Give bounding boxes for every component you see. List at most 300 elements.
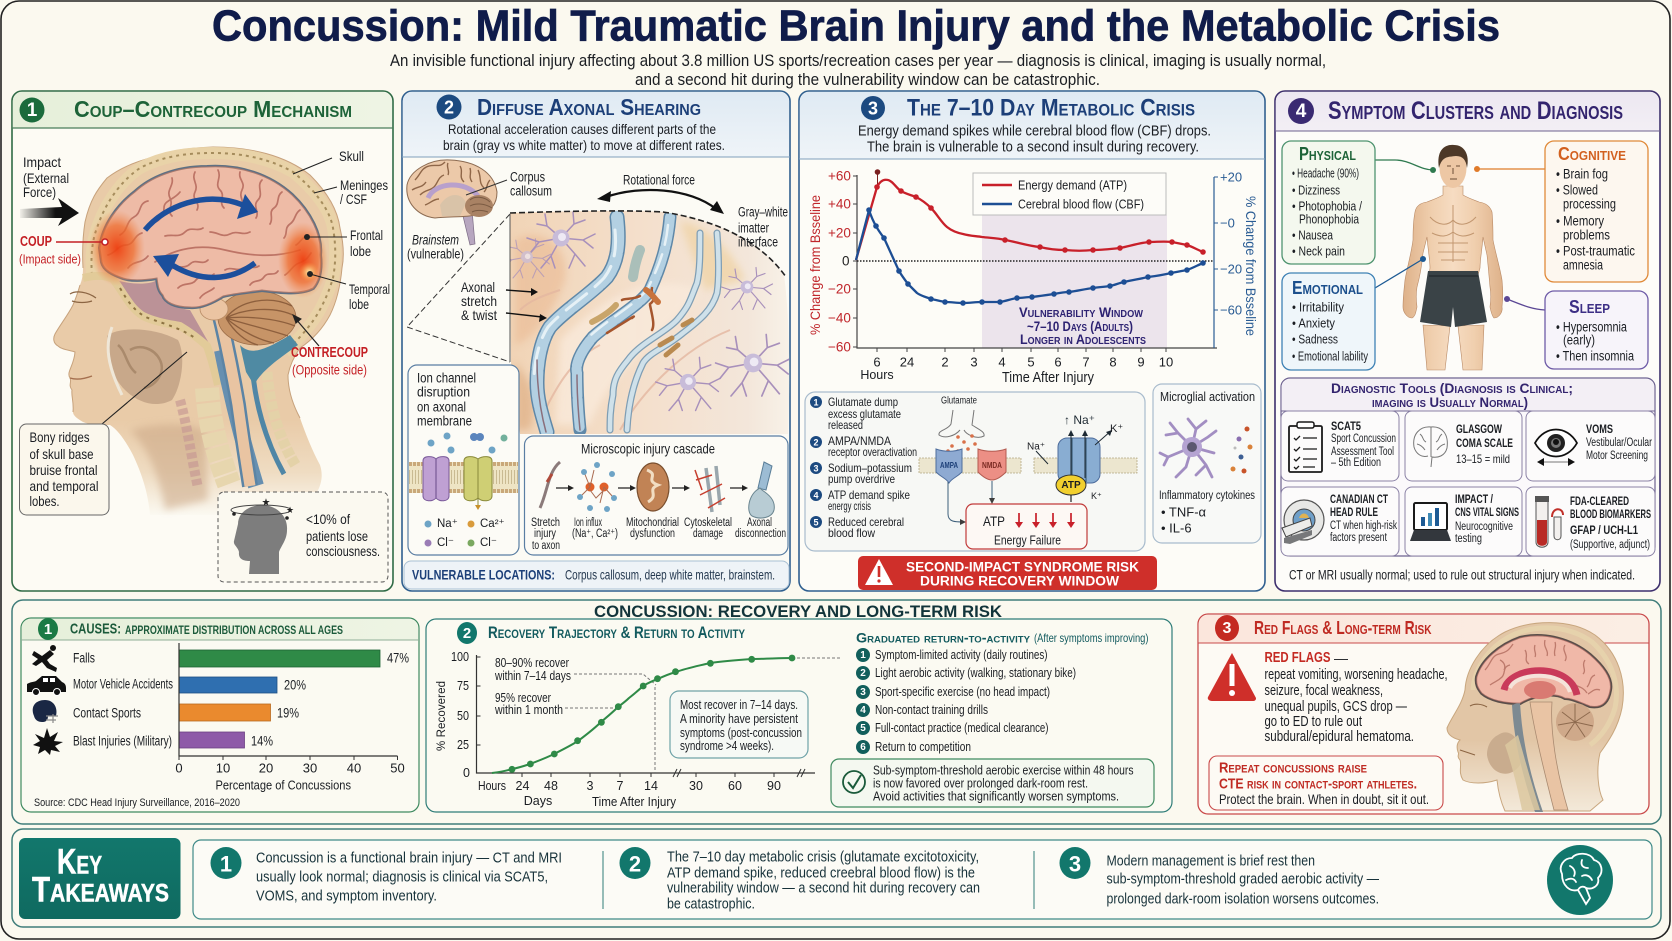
- recovery x labels: 24: [516, 779, 529, 793]
- tool: VOMS: Motor Screening: [1586, 450, 1648, 462]
- panel 3 description: Energy demand spikes while cerebral blood flow (CBF) drops.: [858, 122, 1211, 140]
- panel 1: coup-contrecoup mechanism: [12, 91, 393, 591]
- callout: bony ridges: Bony ridges: [30, 429, 90, 445]
- cascade labels: Stretch: [531, 517, 560, 529]
- corpus and brainstem labels: [407, 170, 552, 262]
- graduated return-to-activity list: Full-contact practice (medical clearance): [875, 721, 1048, 735]
- vulnerable locations bar: VULNERABLE LOCATIONS:: [412, 566, 555, 582]
- CTE risk box: CTE risk in contact-sport athletes.: [1219, 776, 1417, 792]
- recovery x labels: Time After Injury: [592, 795, 677, 809]
- takeaway 1: Concussion is a functional brain injury — CT and MRI: [256, 850, 562, 866]
- gray-white interface label: imatter: [738, 220, 769, 236]
- x-axis labels: 24: [900, 354, 914, 370]
- bar: falls: 47%: [387, 650, 409, 666]
- bar: blast injuries: [33, 728, 273, 755]
- impact label: Impact: [23, 154, 61, 170]
- spine: [180, 308, 298, 488]
- skull base: [83, 276, 218, 385]
- bar: blast injuries: Blast Injuries (Military): [73, 734, 172, 748]
- panel 4: symptom clusters and diagnosis: [1275, 91, 1660, 591]
- tool: blood biomarkers: [1526, 487, 1655, 556]
- cascade icons: [540, 462, 774, 518]
- synapse diagram: Glutamate: [941, 396, 977, 406]
- connectors: [1375, 160, 1545, 310]
- chart legend: Cerebral blood flow (CBF): [1018, 196, 1144, 212]
- emotional symptoms: • Anxiety: [1292, 316, 1335, 330]
- panel 2 heading: Diffuse Axonal Shearing: [477, 94, 701, 120]
- gray-white interface label: Gray–white: [738, 204, 788, 220]
- badge 1: [20, 98, 44, 122]
- y-axis labels left: 0: [842, 254, 850, 268]
- recovery callouts: [494, 656, 571, 717]
- emotional symptoms: • Emotional lability: [1292, 348, 1368, 364]
- cognitive symptoms: • Slowed: [1556, 182, 1598, 198]
- synapse diagram: AMPA: [940, 460, 958, 470]
- cognitive symptoms: [1545, 141, 1648, 282]
- recovery note box: A minority have persistent: [680, 712, 798, 726]
- bar: motor vehicle accidents: Motor Vehicle Accidents: [73, 676, 173, 692]
- recovery y labels: % Recovered: [436, 681, 448, 751]
- sleep symptoms: (early): [1563, 332, 1595, 348]
- numbered mechanism list: Reduced cerebral: [828, 515, 904, 529]
- red flags text: subdural/epidural hematoma.: [1264, 729, 1414, 745]
- external force arrow: [20, 198, 79, 226]
- synapse diagram: [919, 396, 1137, 525]
- microscopic injury cascade: [524, 436, 788, 555]
- mechanism box: [805, 392, 1145, 551]
- numbered mechanism list: released: [828, 418, 863, 432]
- cognitive symptoms: • Memory: [1556, 214, 1604, 228]
- tool: Glasgow Coma Scale: COMA SCALE: [1456, 436, 1513, 450]
- second-impact warning banner: DURING RECOVERY WINDOW: [920, 574, 1119, 588]
- icon: check mark: [843, 771, 865, 793]
- contrecoup label: [291, 315, 368, 378]
- cognitive symptoms: processing: [1563, 196, 1616, 212]
- emotional symptoms: • Sadness: [1292, 332, 1338, 346]
- numbered mechanism list: pump overdrive: [828, 472, 895, 486]
- axon tissue illustration: [407, 211, 790, 434]
- red flags text: repeat vomiting, worsening headache,: [1264, 667, 1448, 683]
- red flags heading: Red Flags & Long-term Risk: [1254, 618, 1432, 638]
- panel: recovery trajectory: [426, 619, 1172, 812]
- CTE risk box: Protect the brain. When in doubt, sit it out.: [1219, 791, 1429, 807]
- numbered mechanism list: 5: [813, 518, 819, 528]
- bar: contact sports: Contact Sports: [73, 706, 141, 720]
- impact label: [23, 154, 69, 200]
- key takeaways section: [12, 829, 1661, 927]
- graduated return-to-activity list: Sport-specific exercise (no head impact): [875, 685, 1050, 699]
- recovery y labels: 100: [451, 650, 469, 664]
- recovery y labels: [436, 650, 470, 780]
- small sagittal brain: [407, 160, 507, 245]
- tool: Canadian CT Head Rule: HEAD RULE: [1330, 505, 1378, 519]
- takeaways box: [193, 840, 1652, 919]
- panel 1 heading: Coup–Contrecoup Mechanism: [74, 96, 352, 122]
- impact label: Force): [23, 184, 56, 200]
- rotational force arrow: Rotational force: [623, 172, 695, 188]
- graduated return-to-activity list: Light aerobic activity (walking, stationary bike): [875, 666, 1076, 680]
- synapse diagram: Na⁺: [1027, 442, 1045, 452]
- badge: causes: 1: [44, 621, 52, 638]
- chart legend: Energy demand (ATP): [1018, 178, 1127, 192]
- recovery x labels: 7: [617, 779, 624, 793]
- vulnerability window: Vulnerability Window: [1019, 304, 1144, 320]
- y-axis labels left: +20: [828, 226, 851, 240]
- microglial activation box: Inflammatory cytokines: [1159, 490, 1255, 502]
- numbered mechanism list: 4: [813, 490, 819, 500]
- synapse diagram: K⁺: [1091, 491, 1102, 501]
- causes heading: APPROXIMATE DISTRIBUTION ACROSS ALL AGES: [125, 623, 343, 637]
- badge 2: [436, 94, 462, 120]
- ion channel box: on axonal: [417, 400, 466, 414]
- ion legend: [424, 518, 505, 549]
- chart legend: [973, 173, 1166, 215]
- numbered mechanism list: excess glutamate: [828, 407, 901, 421]
- recovery note box: symptoms (post-concussion: [680, 726, 802, 740]
- tool: SCAT5: Sport Concussion: [1331, 433, 1396, 445]
- bar axis labels: 40: [347, 760, 361, 776]
- y-axis labels left: −20: [828, 282, 851, 296]
- contrecoup label: CONTRECOUP: [291, 345, 368, 361]
- numbered mechanism list: AMPA/NMDA: [828, 434, 891, 448]
- badge: recovery: 2: [463, 625, 471, 642]
- green recovery curve: [492, 655, 795, 773]
- cerebellum and pons: [200, 291, 296, 345]
- takeaway 3: [1060, 847, 1379, 908]
- cascade labels: (Na⁺, Ca²⁺): [572, 528, 618, 540]
- cognitive symptoms: Cognitive: [1558, 144, 1626, 164]
- cascade labels: Mitochondrial: [626, 517, 679, 529]
- tool: IMPACT: CNS VITAL SIGNS: [1455, 505, 1519, 519]
- physical symptoms: • Neck pain: [1292, 244, 1345, 258]
- takeaway 1: [210, 847, 562, 904]
- panel: red flags and long-term risk: [1198, 614, 1649, 814]
- anatomy labels: [293, 148, 390, 312]
- icon: warning triangle: [1208, 653, 1256, 701]
- callout: bony ridges: and temporal: [30, 478, 98, 494]
- y-axis labels left: −40: [828, 310, 851, 326]
- cascade labels: disconnection: [735, 528, 786, 540]
- gray-white interface label: interface: [738, 234, 778, 250]
- subtitle: An invisible functional injury affecting about 3.8 million US sports/recreation cases per year — diagnosis is clinical, imaging is usually normal,: [390, 52, 1326, 70]
- takeaway 3: prolonged dark-room isolation worsens outcomes.: [1106, 890, 1379, 908]
- cascade labels: damage: [693, 528, 723, 540]
- subtitle: and a second hit during the vulnerability window can be catastrophic.: [635, 71, 1100, 89]
- physical symptoms: • Dizziness: [1292, 182, 1340, 198]
- panel 3 description: The brain is vulnerable to a second insult during recovery.: [867, 138, 1199, 156]
- numbered mechanism list: [810, 395, 917, 540]
- subtitle: [390, 52, 1326, 89]
- recovery note box: syndrome >4 weeks).: [680, 739, 774, 753]
- ion channel box: membrane: [417, 414, 472, 428]
- tool: Glasgow Coma Scale: [1405, 411, 1522, 481]
- cascade labels: Cytoskeletal: [684, 517, 732, 529]
- ATP energy failure box: [966, 504, 1087, 549]
- cognitive symptoms: • Brain fog: [1556, 166, 1608, 182]
- bar: motor vehicle accidents: [27, 676, 306, 696]
- numbered mechanism list: ATP demand spike: [828, 488, 910, 502]
- diagnostic heading: [1331, 380, 1573, 410]
- bar axis labels: 20: [259, 760, 273, 776]
- head anatomy illustration: [54, 147, 343, 515]
- recovery x labels: 60: [728, 779, 742, 793]
- exercise recommendation box: is now favored over prolonged dark-room rest.: [873, 776, 1088, 790]
- graduated return-to-activity list: 1: [860, 650, 866, 661]
- ion legend: Ca²⁺: [480, 518, 505, 530]
- x-axis labels: Time After Injury: [1002, 370, 1095, 386]
- graduated return-to-activity list: Return to competition: [875, 740, 971, 754]
- CTE risk box: [1209, 756, 1443, 810]
- vulnerability window: Longer in Adolescents: [1020, 331, 1146, 347]
- badge: red flags: [1215, 615, 1239, 641]
- blue curve: cerebral blood flow: [856, 207, 1206, 306]
- badge 3: [861, 96, 885, 120]
- line chart: metabolic crisis: [807, 168, 1259, 386]
- panel 2: diffuse axonal shearing: [402, 91, 790, 591]
- anatomy labels: Temporal: [349, 281, 390, 297]
- panel 2 description: [443, 121, 725, 153]
- numbered mechanism list: 1: [813, 398, 819, 408]
- badge 3: 3: [868, 98, 878, 118]
- contrecoup label: (Opposite side): [292, 362, 367, 378]
- red flags text: seizure, focal weakness,: [1264, 683, 1383, 699]
- graduated return-to-activity list: 6: [860, 742, 866, 753]
- bar: falls: Falls: [73, 650, 95, 666]
- y-axis labels right: +20: [1220, 170, 1242, 184]
- panel 3 description: [858, 122, 1211, 156]
- takeaway 2: vulnerability window — a second hit during recovery can: [667, 880, 980, 896]
- axonal stretch label: & twist: [461, 307, 497, 323]
- vulnerable locations bar: [404, 561, 789, 589]
- bar axis labels: 10: [216, 760, 230, 776]
- axon strands: [534, 217, 718, 432]
- panel 2 description: Rotational acceleration causes different parts of the: [448, 121, 716, 137]
- takeaway 2: [620, 847, 980, 912]
- key takeaways block: Key: [57, 842, 102, 882]
- anatomy labels: Meninges: [340, 177, 388, 193]
- takeaway 1: usually look normal; diagnosis is clinical via SCAT5,: [256, 868, 548, 886]
- synapse diagram: NMDA: [982, 460, 1002, 470]
- recovery x labels: 30: [689, 779, 703, 793]
- tool: VOMS: Vestibular/Ocular: [1586, 437, 1652, 449]
- gray-white interface label: [738, 204, 788, 250]
- cascade labels: Axonal: [747, 517, 772, 529]
- takeaway 1: 1: [220, 852, 232, 876]
- numbered mechanism list: blood flow: [828, 526, 875, 540]
- sleep symptoms: • Then insomnia: [1556, 348, 1634, 364]
- badge: red flags: 3: [1223, 620, 1232, 637]
- synapse diagram: K⁺: [1110, 423, 1123, 435]
- icon: brain in teal circle: [1547, 845, 1613, 915]
- numbered mechanism list: 2: [813, 438, 819, 448]
- takeaway 3: sub-symptom-threshold graded aerobic activity —: [1106, 870, 1379, 888]
- microscopic injury cascade: Microscopic injury cascade: [581, 440, 715, 456]
- callout: loss of consciousness: consciousness.: [306, 543, 380, 559]
- panel 2 description: brain (gray vs white matter) to move at different rates.: [443, 137, 725, 153]
- icon: dizzy head silhouette: ★: [286, 505, 294, 515]
- sleep symptoms: Sleep: [1569, 297, 1610, 317]
- badge 4: 4: [1296, 101, 1307, 122]
- cognitive symptoms: amnesia: [1563, 258, 1603, 272]
- y-axis labels right: [1220, 170, 1259, 336]
- x-axis labels: 6: [1054, 354, 1062, 370]
- tool: IMPACT: IMPACT /: [1455, 492, 1493, 506]
- vulnerable locations bar: Corpus callosum, deep white matter, brainstem.: [565, 566, 775, 582]
- tool: VOMS: VOMS: [1586, 422, 1613, 436]
- graduated return-to-activity list: Graduated return-to-activity: [856, 630, 1030, 646]
- impact glow areas: [89, 210, 328, 298]
- x-axis labels: 4: [998, 354, 1006, 370]
- membrane with channels: [409, 432, 518, 510]
- red flags text: go to ED to rule out: [1264, 714, 1362, 730]
- recovery callouts: 80–90% recover: [495, 656, 569, 670]
- badge 2: 2: [444, 98, 454, 118]
- graduated return-to-activity list: 5: [860, 723, 866, 734]
- rotation arrows: [145, 194, 258, 278]
- bar: falls: [32, 645, 409, 672]
- cascade labels: to axon: [532, 540, 560, 552]
- red flags text: —: [1334, 650, 1348, 666]
- recovery x labels: Hours: [478, 779, 506, 793]
- graduated return-to-activity list: (After symptoms improving): [1034, 631, 1148, 645]
- tool: Glasgow Coma Scale: GLASGOW: [1456, 422, 1502, 436]
- x-axis labels: 8: [1109, 354, 1117, 370]
- anatomy labels: Frontal: [350, 227, 383, 243]
- vulnerability window: [982, 215, 1167, 348]
- axonal stretch label: stretch: [461, 293, 497, 309]
- numbered mechanism list: Sodium–potassium: [828, 461, 912, 475]
- takeaway 3: Modern management is brief rest then: [1106, 852, 1315, 870]
- tool: blood biomarkers: GFAP / UCH-L1: [1570, 523, 1638, 537]
- cytokine dots: [1230, 426, 1252, 474]
- callout: bony ridges: of skull base: [30, 446, 94, 462]
- numbered mechanism list: 3: [813, 464, 819, 474]
- y-axis labels left: +60: [828, 168, 851, 184]
- bar chart: causes: [27, 643, 409, 792]
- cascade labels: [531, 517, 786, 552]
- graduated return-to-activity list: 2: [860, 668, 866, 679]
- recovery curve chart: [436, 650, 840, 809]
- panel: causes: [21, 618, 419, 812]
- physical symptoms: Physical: [1299, 144, 1356, 164]
- red curve: energy demand: [856, 169, 1206, 260]
- ion legend: Na⁺: [437, 518, 458, 530]
- corpus and brainstem labels: callosum: [510, 184, 552, 198]
- bar axis labels: [175, 760, 405, 792]
- source note: Source: CDC Head Injury Surveillance, 2016–2020: [34, 797, 240, 809]
- numbered mechanism list: receptor overactivation: [828, 445, 917, 459]
- y-axis labels left: % Change from Bsseline: [807, 195, 823, 335]
- cognitive symptoms: • Post-traumatic: [1556, 244, 1635, 258]
- recovery x labels: Days: [524, 794, 552, 808]
- ATP energy failure box: Energy Failure: [994, 532, 1061, 548]
- recovery y labels: 75: [457, 679, 469, 693]
- x-axis labels: 6: [873, 354, 881, 370]
- tool: SCAT5: [1281, 411, 1399, 481]
- panel 3: metabolic crisis: [799, 91, 1265, 591]
- recovery y labels: 0: [463, 766, 470, 780]
- bar axis labels: Percentage of Concussions: [216, 778, 351, 792]
- rotational force arrow: [597, 172, 724, 214]
- tool: IMPACT: testing: [1455, 533, 1482, 545]
- takeaway 3: 3: [1069, 852, 1081, 876]
- second-impact warning banner: SECOND-IMPACT SYNDROME RISK: [906, 560, 1139, 574]
- tool: Glasgow Coma Scale: 13–15 = mild: [1456, 452, 1510, 466]
- ion channel box: Ion channel: [417, 370, 476, 386]
- ion legend: Cl⁻: [437, 537, 454, 549]
- bar axis labels: 50: [390, 760, 405, 776]
- bar axis labels: 30: [303, 760, 317, 776]
- y-axis labels right: −60: [1220, 302, 1242, 318]
- coup label: [19, 234, 108, 266]
- axonal stretch label: Axonal: [461, 279, 495, 295]
- recovery x labels: 48: [544, 779, 558, 793]
- tool: Canadian CT Head Rule: [1281, 487, 1399, 556]
- ion channel box: [408, 365, 519, 555]
- callout: loss of consciousness: [218, 492, 388, 582]
- tool: Canadian CT Head Rule: CANADIAN CT: [1330, 492, 1388, 506]
- recovery x labels: [478, 779, 781, 809]
- recovery x labels: 3: [587, 779, 594, 793]
- y-axis labels right: % Change from Bsseline: [1243, 196, 1259, 336]
- recovery callouts: within 7–14 days: [494, 669, 571, 683]
- x-axis labels: 9: [1137, 354, 1145, 370]
- recovery callouts: 95% recover: [495, 691, 551, 705]
- corpus and brainstem labels: Corpus: [510, 170, 545, 184]
- ATP pump badge: ATP: [1061, 480, 1081, 491]
- badge 1: 1: [27, 100, 38, 121]
- axonal stretch label: [461, 279, 547, 323]
- graduated return-to-activity list: [856, 630, 1148, 754]
- callout: bony ridges: bruise frontal: [30, 462, 98, 478]
- synapse diagram: ↑ Na⁺: [1064, 413, 1095, 427]
- coup label: COUP: [20, 234, 52, 250]
- takeaway 1: VOMS, and symptom inventory.: [256, 888, 437, 904]
- physical symptoms: Phonophobia: [1299, 212, 1360, 226]
- vulnerability window: ~7–10 Days (Adults): [1027, 318, 1133, 334]
- key takeaways block: Takeaways: [32, 870, 169, 910]
- anatomy labels: lobe: [349, 296, 369, 312]
- key takeaways block: [19, 838, 180, 919]
- diagnostic tools: [1281, 378, 1655, 556]
- takeaway 2: ATP demand spike, reduced creebral blood flow) is the: [667, 864, 975, 882]
- diagnostic heading: imaging is Usually Normal): [1372, 394, 1528, 410]
- takeaway 2: The 7–10 day metabolic crisis (glutamate excitotoxicity,: [667, 848, 979, 866]
- icon: microglia cell: [1160, 419, 1216, 477]
- y-axis labels left: [807, 168, 851, 354]
- y-axis labels right: −0: [1220, 216, 1235, 230]
- x-axis labels: 3: [970, 354, 978, 370]
- sleep symptoms: [1545, 291, 1648, 369]
- badge: recovery: [457, 622, 477, 644]
- x-axis labels: 10: [1159, 354, 1173, 370]
- second-impact warning banner: [858, 556, 1157, 590]
- tool: SCAT5: Assessment Tool: [1331, 446, 1394, 458]
- badge 4: [1288, 98, 1314, 124]
- recovery x labels: 14: [644, 779, 658, 793]
- graduated return-to-activity list: 3: [860, 687, 866, 698]
- impact label: (External: [23, 170, 69, 186]
- bar: contact sports: 19%: [277, 706, 299, 720]
- cascade labels: injury: [534, 528, 556, 540]
- bar: blast injuries: 14%: [251, 734, 273, 748]
- emotional symptoms: Emotional: [1292, 278, 1363, 298]
- y-axis labels left: −60: [828, 340, 851, 354]
- icon: dizzy head silhouette: ★: [262, 498, 271, 508]
- tool: Canadian CT Head Rule: factors present: [1330, 532, 1388, 544]
- recovery y labels: 25: [457, 738, 469, 752]
- graduated return-to-activity list: Symptom-limited activity (daily routines): [875, 648, 1048, 662]
